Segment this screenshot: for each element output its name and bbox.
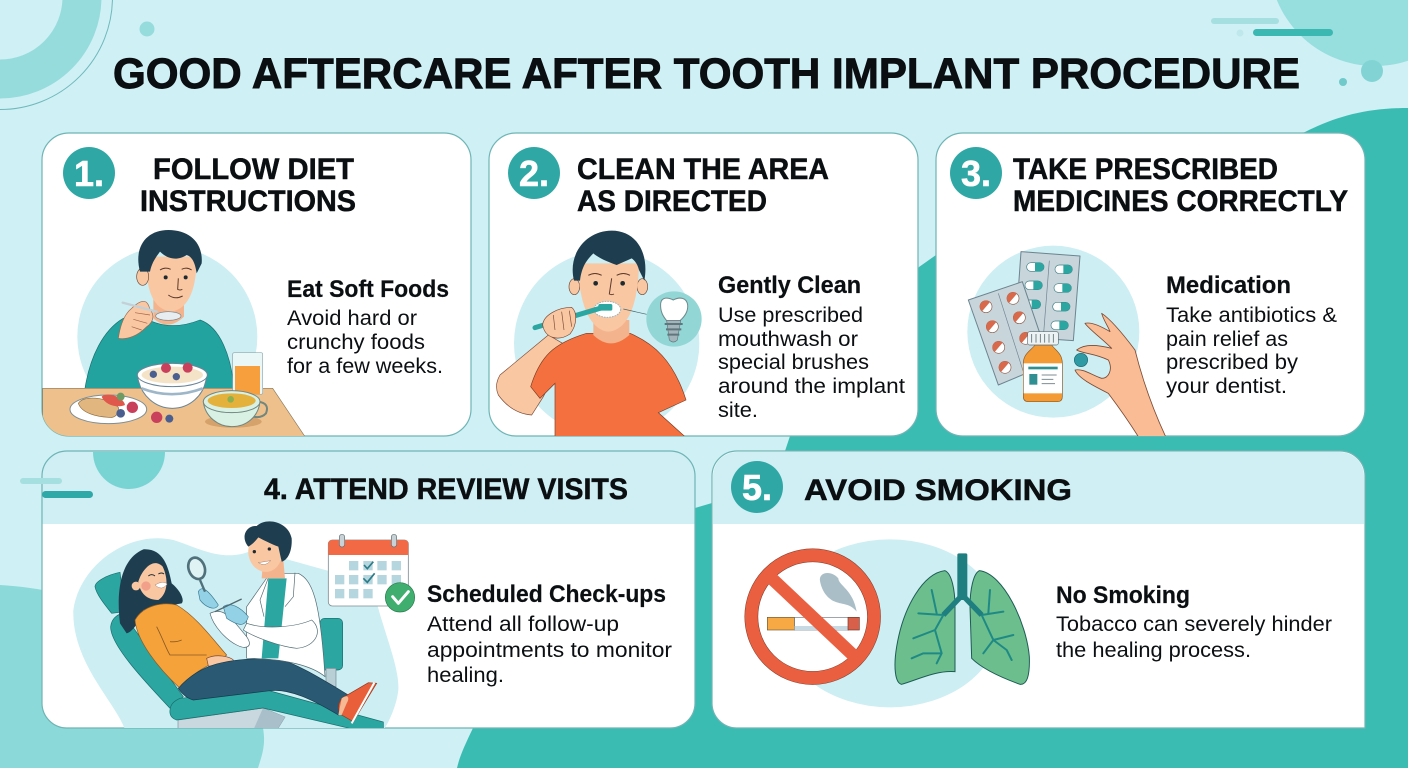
number badge 3: [950, 147, 1002, 199]
heading 5: AVOID SMOKING: [804, 474, 1072, 507]
panel: follow diet instructions: [42, 133, 471, 437]
text: scheduled check-ups: [427, 581, 672, 687]
number badge 2: [508, 147, 560, 199]
number badge 5: [731, 461, 783, 513]
panel: take prescribed medicines: [936, 133, 1365, 437]
header decoration: [20, 452, 165, 498]
text: gently clean: Gently Clean: [718, 272, 861, 299]
text: no smoking: No Smoking: [1056, 582, 1190, 609]
title: GOOD AFTERCARE AFTER TOOTH IMPLANT PROCEDURE: [113, 50, 1300, 98]
heading 1: [140, 153, 356, 218]
panel: avoid smoking: [712, 451, 1365, 728]
panel: clean the area: [489, 133, 918, 437]
text: medication: Medication: [1166, 272, 1291, 299]
heading 3: MEDICINES CORRECTLY: [1013, 185, 1348, 218]
heading 3: [1013, 153, 1348, 218]
text: gently clean: special brushes: [718, 350, 869, 374]
heading 1: INSTRUCTIONS: [140, 185, 356, 218]
number badge 3: 3.: [961, 153, 991, 194]
illustration: dentist and patient: [73, 521, 415, 730]
text: scheduled check-ups: healing.: [427, 663, 504, 687]
panel 4 header band: [42, 451, 695, 524]
heading 3: TAKE PRESCRIBED: [1013, 153, 1278, 186]
text: eat soft foods: Eat Soft Foods: [287, 276, 449, 303]
text: medication: [1166, 272, 1337, 398]
text: eat soft foods: [287, 276, 449, 378]
text: gently clean: Use prescribed: [718, 303, 863, 327]
heading 4: 4. ATTEND REVIEW VISITS: [264, 473, 628, 506]
text: gently clean: site.: [718, 398, 758, 422]
heading 2: CLEAN THE AREA: [577, 153, 829, 186]
text: eat soft foods: Avoid hard or: [287, 306, 417, 330]
text: gently clean: [718, 272, 905, 422]
text: medication: your dentist.: [1166, 374, 1287, 398]
text: no smoking: Tobacco can severely hinder: [1056, 612, 1332, 636]
text: medication: pain relief as: [1166, 327, 1288, 351]
illustration: man brushing teeth: [497, 231, 702, 437]
panel 5 header band: [713, 452, 1364, 524]
text: eat soft foods: crunchy foods: [287, 330, 425, 354]
panel: attend review visits: [20, 451, 695, 730]
illustration: pills and hand: [967, 246, 1166, 437]
heading 1: FOLLOW DIET: [153, 153, 354, 186]
heading 2: [577, 153, 829, 218]
text: gently clean: around the implant: [718, 374, 905, 398]
number badge 2: 2.: [519, 153, 549, 194]
text: gently clean: mouthwash or: [718, 327, 858, 351]
text: medication: prescribed by: [1166, 350, 1298, 374]
text: eat soft foods: for a few weeks.: [287, 354, 443, 378]
text: scheduled check-ups: Attend all follow-up: [427, 612, 619, 636]
text: scheduled check-ups: appointments to monitor: [427, 638, 672, 662]
number badge 5: 5.: [742, 467, 772, 508]
number badge 1: 1.: [74, 153, 104, 194]
heading 2: AS DIRECTED: [577, 185, 767, 218]
illustration: no smoking sign and lungs: [751, 539, 1029, 707]
text: medication: Take antibiotics &: [1166, 303, 1337, 327]
number badge 1: [63, 147, 115, 199]
text: no smoking: the healing process.: [1056, 638, 1251, 662]
text: no smoking: [1056, 582, 1332, 662]
text: scheduled check-ups: Scheduled Check-ups: [427, 581, 666, 608]
illustration: man eating soft food: [43, 230, 305, 437]
